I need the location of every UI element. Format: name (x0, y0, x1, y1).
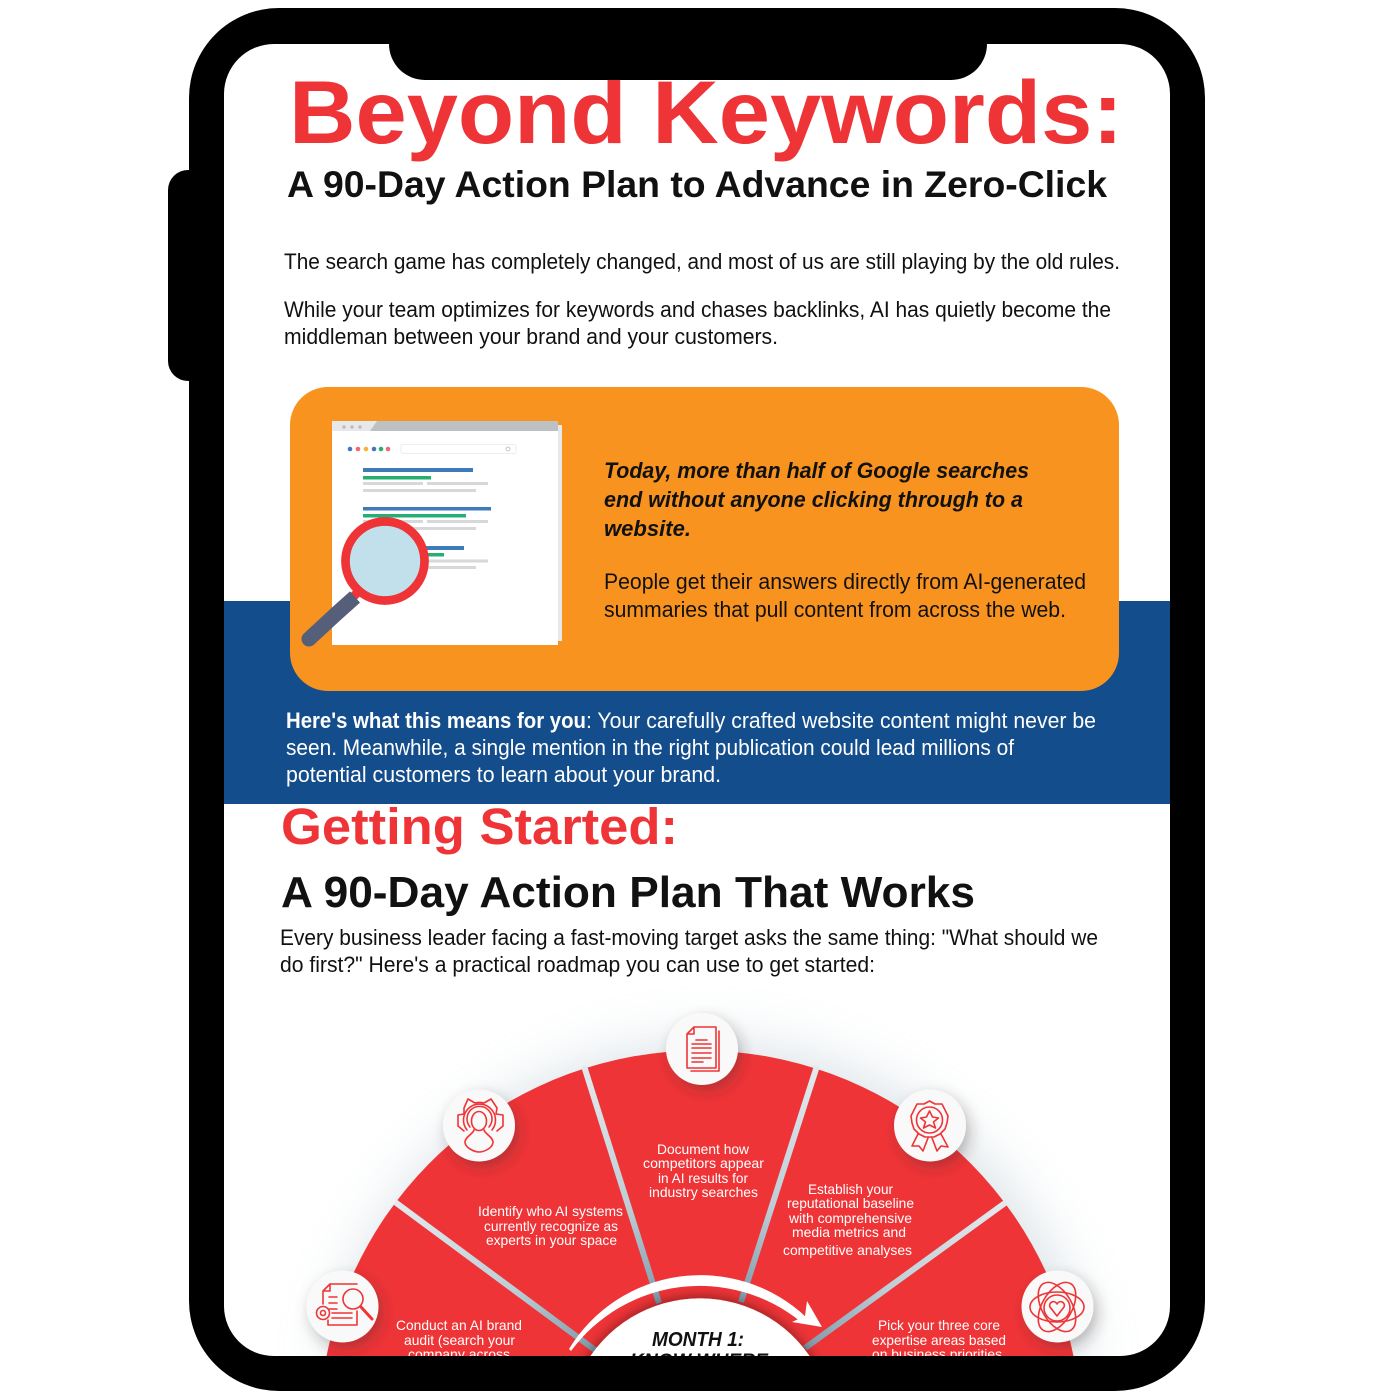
intro text: The search game has completely changed, and most of us are still playing by the old rules. (284, 249, 1120, 274)
segment text: reputational baseline: with comprehensive (788, 1210, 912, 1226)
hub label: KNOW WHERE (630, 1351, 769, 1372)
text block: roadmap intro (280, 925, 1098, 977)
segment text: expertise areas (872, 1320, 1006, 1356)
text block: what this means: Here's what this means for you (286, 708, 586, 733)
device frame (168, 8, 1205, 1391)
icon: atom with heart (1022, 1270, 1094, 1342)
device notch (389, 40, 987, 80)
segment text: expertise areas: Pick your three core (878, 1317, 1000, 1333)
text block: what this means (286, 708, 1096, 787)
segment text: expertise areas: expertise areas based (872, 1332, 1006, 1348)
segment text: expertise areas: on business priorities (872, 1346, 1002, 1362)
title: Beyond Keywords: (289, 62, 1123, 162)
chart: month 1 radial fan (306, 1013, 1094, 1372)
segment text: identify experts: currently recognize as (484, 1218, 618, 1234)
panel: orange callout (290, 387, 1119, 691)
intro text: While your team optimizes for keywords and chases backlinks, AI has quietly become the (284, 297, 1111, 322)
segment text: brand audit: Conduct an AI brand (396, 1317, 522, 1333)
icon: browser search results with magnifying glass (309, 421, 562, 645)
segment text: brand audit: company across (408, 1346, 510, 1362)
callout text: end without anyone clicking through to a (604, 487, 1023, 512)
segment text: document competitors: Document how (657, 1141, 750, 1157)
text block: roadmap intro: Every business leader facing a fast-moving target asks the same thing: "What should we (280, 925, 1098, 950)
callout text: website. (604, 516, 691, 541)
blue band (224, 601, 1170, 804)
icon: document (666, 1013, 738, 1085)
icon: award ribbon (894, 1090, 966, 1162)
icon: document search with gear (306, 1270, 378, 1342)
device screen (224, 44, 1170, 1356)
heading: getting started: Getting Started: (281, 798, 678, 855)
screen content (224, 62, 1170, 1372)
text block: roadmap intro: do first?" Here's a practical roadmap you can use to get started: (280, 952, 875, 977)
segment text: reputational baseline: Establish your (808, 1181, 893, 1197)
segment text: document competitors: industry searches (649, 1184, 758, 1200)
segment text: identify experts: Identify who AI systems (478, 1203, 623, 1219)
arrow: curved month arrow (569, 1275, 822, 1351)
device side button (168, 170, 192, 381)
intro text: middleman between your brand and your customers. (284, 324, 778, 349)
segment text: document competitors: competitors appear (643, 1155, 764, 1171)
segment text: identify experts: experts in your space (486, 1232, 617, 1248)
segment text: brand audit (396, 1320, 522, 1356)
segment text: reputational baseline (783, 1181, 914, 1258)
segment text: reputational baseline: reputational baseline (787, 1195, 914, 1211)
subtitle: A 90-Day Action Plan to Advance in Zero-Click (287, 164, 1107, 205)
hub label (632, 1332, 768, 1356)
segment text: brand audit: audit (search your (404, 1332, 515, 1348)
callout text (604, 458, 1086, 622)
text block: what this means: potential customers to learn about your brand. (286, 762, 721, 787)
callout text: People get their answers directly from AI-generated (604, 569, 1086, 594)
segment text: document competitors (643, 1141, 764, 1200)
text block: what this means: : Your carefully crafted website content might never be (586, 708, 1096, 733)
heading: action plan: A 90-Day Action Plan That Works (281, 868, 975, 917)
text block: what this means: seen. Meanwhile, a single mention in the right publication could lead millions of (286, 735, 1015, 760)
hub label: MONTH 1: (652, 1329, 744, 1351)
icon: person in gear (443, 1090, 515, 1162)
segment text: document competitors: in AI results for (658, 1170, 748, 1186)
segment text: identify experts (478, 1203, 623, 1248)
segment text: reputational baseline: competitive analyses (783, 1242, 912, 1258)
callout text: Today, more than half of Google searches (604, 458, 1029, 483)
intro text (284, 249, 1120, 349)
segment text: reputational baseline: media metrics and (792, 1224, 906, 1240)
callout text: summaries that pull content from across the web. (604, 597, 1066, 622)
